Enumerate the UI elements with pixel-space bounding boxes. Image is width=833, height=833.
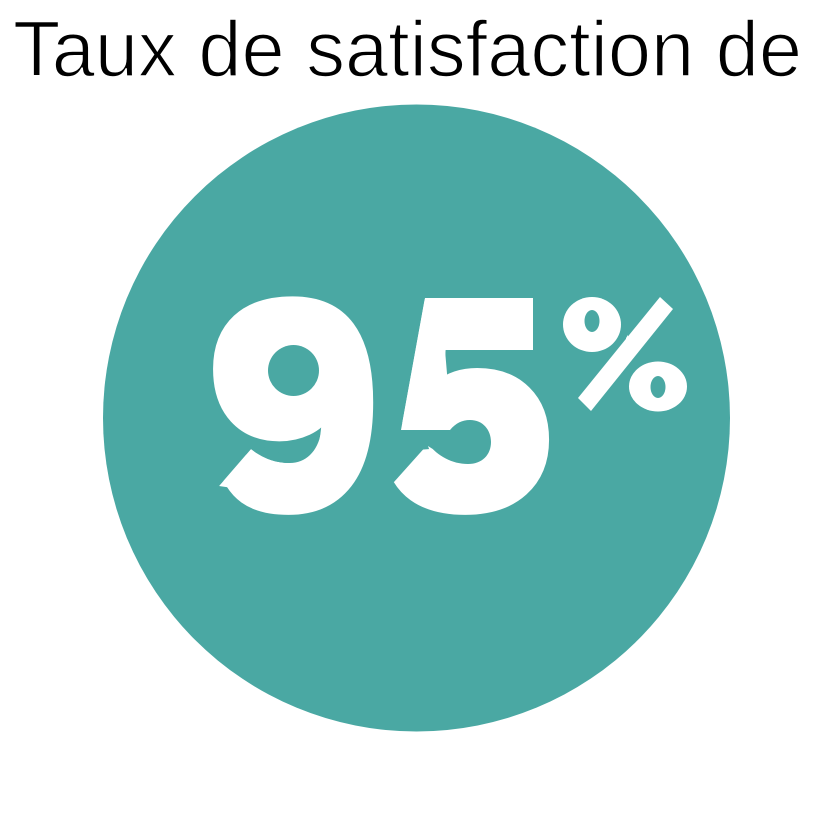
teal circle with satisfaction figure bbox=[103, 104, 730, 732]
number 95: 95 bbox=[207, 240, 553, 570]
percent sign: % bbox=[562, 269, 689, 437]
circle background bbox=[103, 104, 730, 732]
title: Taux de satisfaction de bbox=[13, 4, 802, 93]
